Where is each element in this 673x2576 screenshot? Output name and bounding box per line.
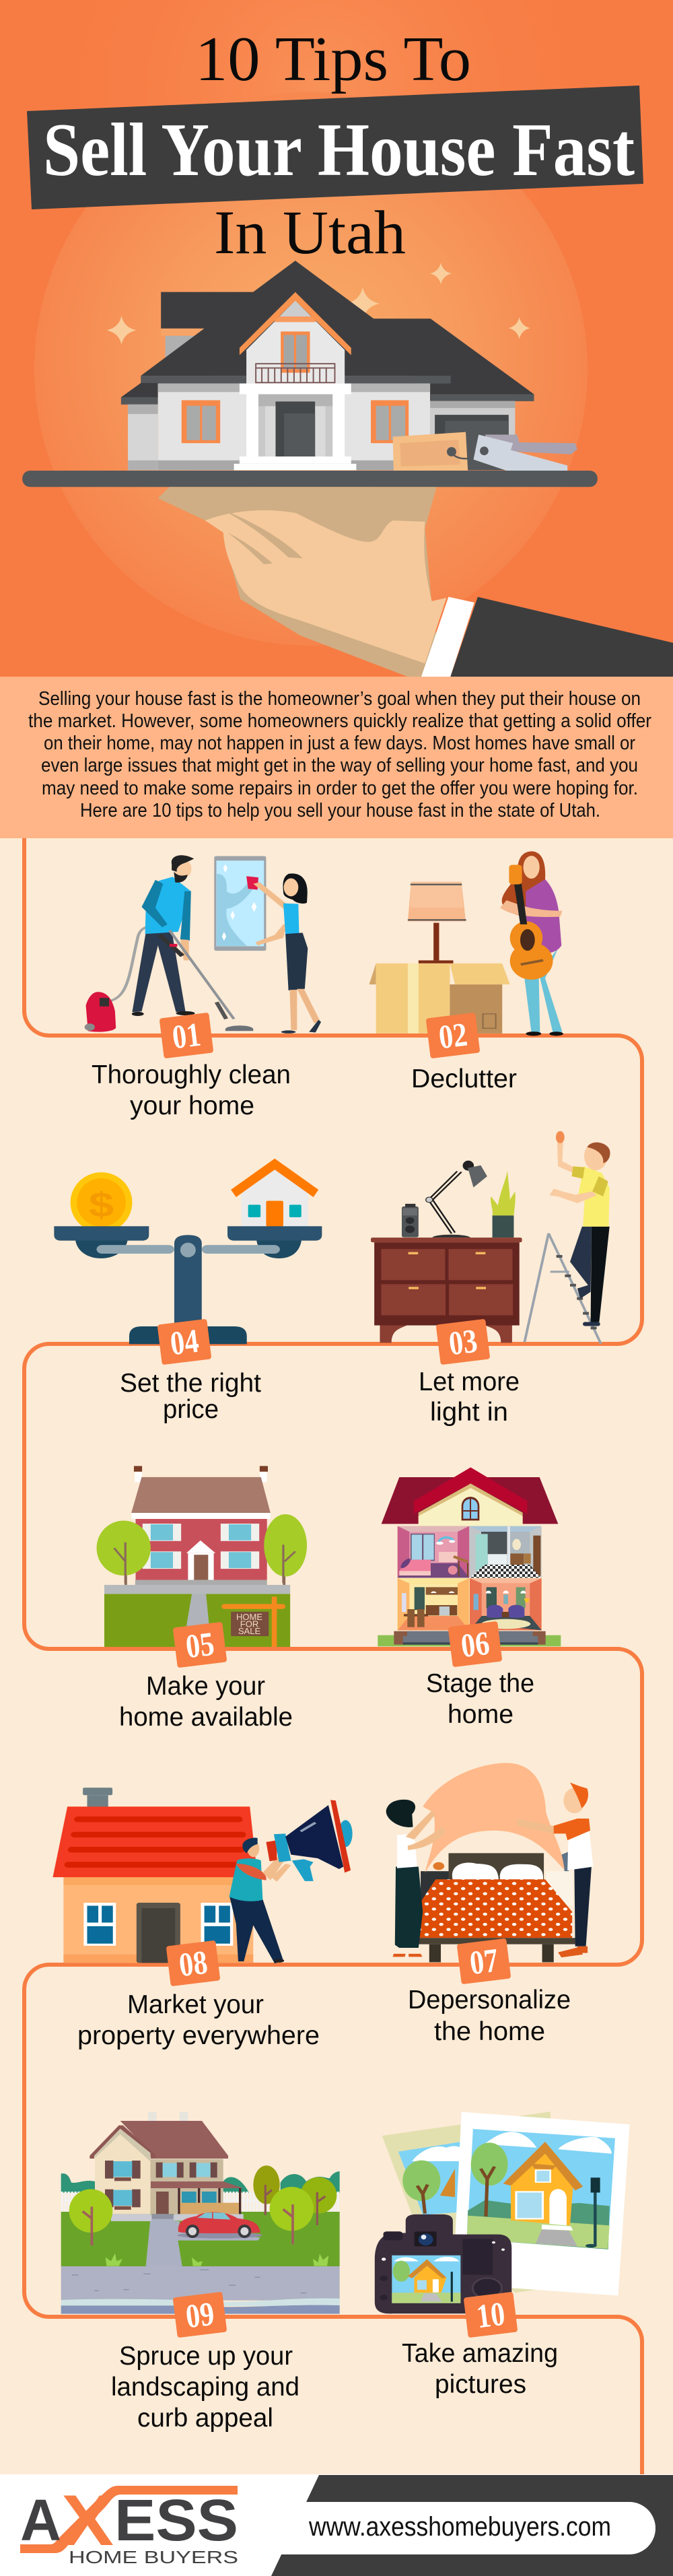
sign text: home for sale: SALE xyxy=(238,1626,260,1636)
illustration 04: scale with coin and house xyxy=(54,1159,322,1344)
illustration 02: declutter box, lamp, woman with guitar xyxy=(369,851,563,1036)
number badge 10: 10 xyxy=(474,2295,507,2335)
back photo xyxy=(382,2111,558,2293)
tip label 05 xyxy=(119,1672,293,1732)
number badge 04: 04 xyxy=(168,1322,201,1362)
number badge 02 xyxy=(426,1013,480,1058)
sign text: home for sale: HOME xyxy=(236,1612,262,1622)
logo xyxy=(20,2480,238,2567)
sparkles xyxy=(107,263,530,345)
kitchen xyxy=(398,1578,469,1630)
number badge 10 xyxy=(464,2292,518,2338)
tip label 07: the home xyxy=(434,2017,545,2046)
footer xyxy=(0,2474,673,2576)
tip label 09: Spruce up your xyxy=(119,2342,293,2371)
number badge 09: 09 xyxy=(184,2295,216,2335)
living room xyxy=(470,1578,542,1630)
logo: X xyxy=(61,2480,114,2561)
tip label 07 xyxy=(408,1986,571,2046)
tip label 10: Take amazing xyxy=(402,2339,558,2368)
tip label 09 xyxy=(111,2342,299,2433)
front photo xyxy=(453,2112,630,2296)
tip label 06 xyxy=(426,1669,534,1729)
bathroom xyxy=(469,1526,542,1578)
tip 9 trees xyxy=(69,2165,336,2245)
tip 9 car xyxy=(177,2212,262,2239)
bedroom xyxy=(398,1526,469,1578)
keys and tag xyxy=(393,432,577,471)
camera xyxy=(375,2214,511,2313)
sign text: home for sale: FOR xyxy=(240,1619,258,1629)
intro panel xyxy=(0,677,673,838)
number badge 07 xyxy=(457,1938,511,1984)
illustration 04: scale with coin and house: $ xyxy=(89,1185,114,1224)
tip label 10 xyxy=(402,2339,558,2399)
tip label 10: pictures xyxy=(435,2370,526,2399)
number badge 03: 03 xyxy=(447,1322,479,1362)
illustration 05: red brick house with sale sign xyxy=(97,1466,307,1647)
number badge 07: 07 xyxy=(468,1941,500,1981)
number badge 01: 01 xyxy=(170,1015,203,1056)
website pill: www.axesshomebuyers.com xyxy=(308,2512,611,2542)
cuff and sleeve xyxy=(421,597,673,679)
tips background xyxy=(0,838,673,2475)
website pill xyxy=(202,2502,656,2554)
number badge 05: 05 xyxy=(184,1625,216,1665)
tip label 08: Market your xyxy=(127,1990,264,2019)
illustration 06: dollhouse cross-section xyxy=(378,1467,561,1646)
number badge 01 xyxy=(160,1013,213,1058)
hero background xyxy=(0,0,673,677)
tip label 03 xyxy=(419,1367,520,1427)
title banner xyxy=(27,86,643,209)
logo: HOME BUYERS xyxy=(69,2547,238,2567)
steps and lawn xyxy=(378,1631,561,1646)
hand xyxy=(158,487,446,677)
tip label 03: Let more xyxy=(419,1367,520,1396)
tip label 01: Thoroughly clean xyxy=(92,1060,291,1089)
number badge 03 xyxy=(436,1319,490,1365)
tip label 01: your home xyxy=(130,1091,254,1120)
winding path line xyxy=(24,838,642,2476)
tip label 05: Make your xyxy=(146,1672,265,1701)
house xyxy=(121,261,534,470)
illustration 03: dresser, lamp and man on ladder xyxy=(371,1131,610,1344)
tip label 08: property everywhere xyxy=(77,2021,320,2050)
tip label 03: light in xyxy=(430,1398,508,1427)
tip label 08 xyxy=(77,1990,320,2050)
tip 9 grass tufts xyxy=(106,2253,328,2266)
tip label 09: curb appeal xyxy=(137,2404,273,2433)
illustration 09: house with garden and car xyxy=(61,2112,340,2314)
tip 9 house xyxy=(90,2112,244,2219)
title line: In Utah: In Utah xyxy=(214,198,406,267)
tip label 02: Declutter xyxy=(411,1064,517,1093)
sign text: home for sale xyxy=(236,1612,262,1636)
number badge 05 xyxy=(173,1622,227,1668)
tip label 04 xyxy=(120,1369,261,1424)
hero illustration: house on a tray held by a hand xyxy=(22,261,673,679)
tip label 05: home available xyxy=(119,1703,293,1732)
tray xyxy=(22,471,598,487)
tip label 04: price xyxy=(163,1395,219,1424)
illustration 08: house with megaphone man xyxy=(52,1788,353,1963)
tip label 01 xyxy=(92,1060,291,1120)
number badge 08: 08 xyxy=(177,1943,209,1984)
number badge 09 xyxy=(173,2292,227,2338)
number badge 06: 06 xyxy=(459,1624,491,1664)
number badge 04 xyxy=(157,1319,211,1365)
intro panel: Here are 10 tips to help you sell your house fast in the state of Utah. xyxy=(80,800,600,821)
number badge 06 xyxy=(448,1621,502,1667)
logo: ESS xyxy=(114,2488,238,2553)
tip label 07: Depersonalize xyxy=(408,1986,571,2014)
illustration 01: cleaning couple xyxy=(85,855,321,1033)
number badge 02: 02 xyxy=(437,1015,469,1056)
tip label 06: home xyxy=(448,1700,513,1729)
tip label 06: Stage the xyxy=(426,1669,534,1698)
tip label 04: Set the right xyxy=(120,1369,261,1398)
title line: 10 Tips To: 10 Tips To xyxy=(195,24,471,94)
number badge 08 xyxy=(166,1940,220,1986)
illustration 07: couple making a bed xyxy=(386,1763,593,1962)
tip label 09: landscaping and xyxy=(111,2373,299,2402)
illustration 10: photos and camera xyxy=(375,2111,630,2313)
logo: A xyxy=(20,2488,61,2553)
